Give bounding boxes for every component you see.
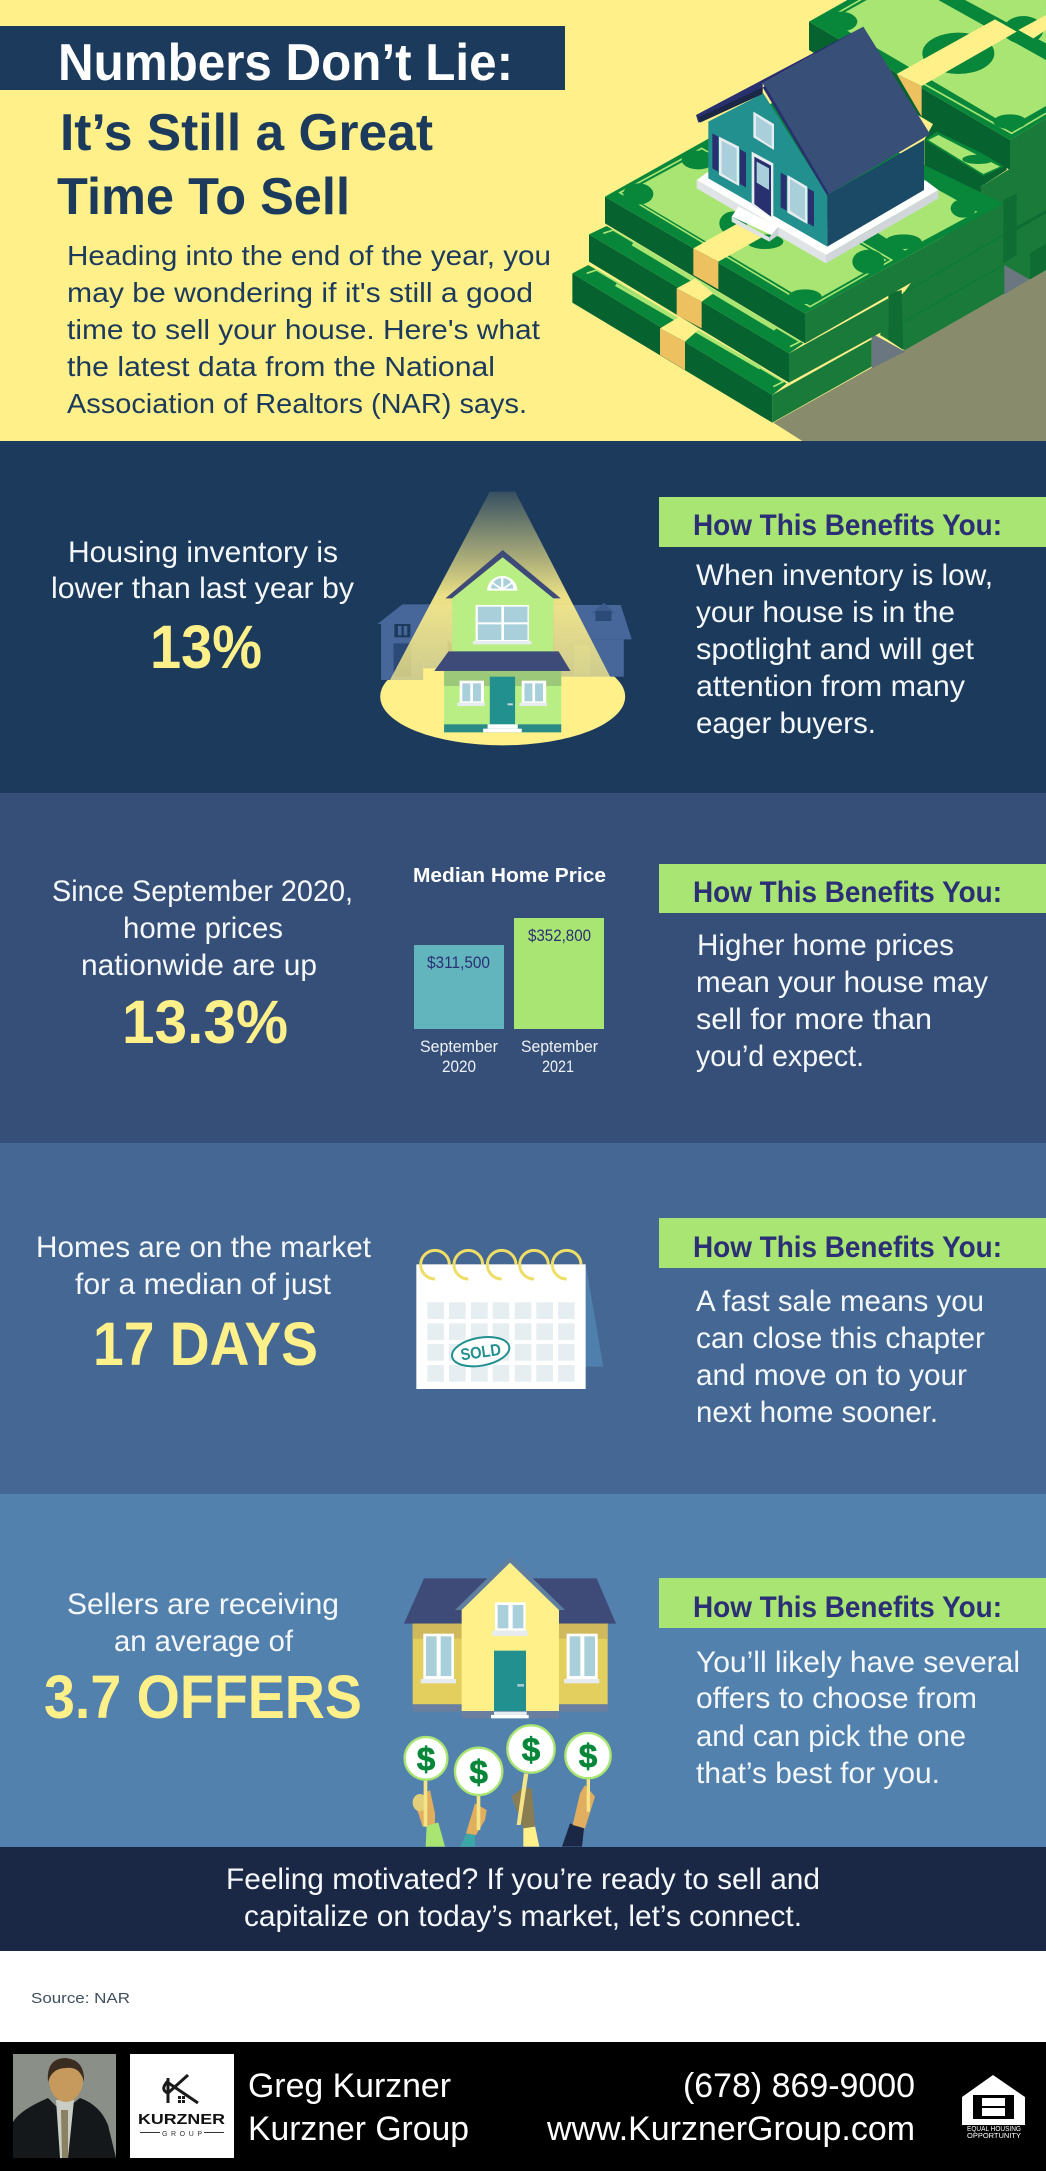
icon: calendar with sold stamp xyxy=(416,1250,603,1389)
statistic text: Sellers are receiving xyxy=(67,1588,339,1621)
benefit banner: How This Benefits You: xyxy=(693,1231,1002,1264)
statistic text: for a median of just xyxy=(75,1268,332,1301)
intro paragraph xyxy=(67,240,551,419)
statistic text xyxy=(52,875,353,1056)
intro paragraph: Association of Realtors (NAR) says. xyxy=(67,388,527,419)
call to action band: capitalize on today’s market, let’s connect. xyxy=(244,1900,802,1933)
benefit text: and can pick the one xyxy=(696,1720,966,1753)
statistic text xyxy=(36,1231,372,1378)
benefit banner: How This Benefits You: xyxy=(693,876,1002,909)
benefit banner xyxy=(659,497,1046,547)
benefit text xyxy=(696,929,988,1073)
call to action band: Feeling motivated? If you’re ready to sell and xyxy=(226,1863,820,1896)
benefit text: you’d expect. xyxy=(696,1040,864,1073)
icon: house with bidding hands xyxy=(404,1556,616,1847)
benefit text xyxy=(696,1285,985,1429)
subtitle: It’s Still a Great xyxy=(60,104,433,162)
statistic text: Since September 2020, xyxy=(52,875,353,908)
source note xyxy=(0,1951,1046,2042)
panel: housing inventory xyxy=(0,441,1046,793)
icon: calendar with sold stamp: SOLD xyxy=(459,1340,502,1364)
panel: offers xyxy=(0,1494,1046,1847)
statistic text: 17 DAYS xyxy=(93,1310,318,1378)
benefit text: attention from many xyxy=(696,670,965,703)
call to action band xyxy=(0,1847,1046,1951)
statistic text: 13% xyxy=(150,613,262,681)
bar chart: median home price: September xyxy=(521,1037,598,1056)
benefit text: spotlight and will get xyxy=(696,633,975,666)
benefit text: next home sooner. xyxy=(696,1396,938,1429)
bar chart: median home price: September xyxy=(420,1037,498,1056)
benefit text: When inventory is low, xyxy=(696,559,993,592)
illustration: house on stacks of money xyxy=(572,0,1046,442)
benefit banner xyxy=(659,1578,1046,1628)
statistic text: nationwide are up xyxy=(81,949,317,982)
intro paragraph: may be wondering if it's still a good xyxy=(67,277,533,308)
icon: house in spotlight xyxy=(378,492,632,745)
benefit text: that’s best for you. xyxy=(696,1757,940,1790)
statistic text: 3.7 OFFERS xyxy=(44,1663,362,1731)
statistic text: home prices xyxy=(123,912,283,945)
contact details xyxy=(546,2067,915,2148)
benefit text: offers to choose from xyxy=(696,1682,977,1715)
panel: home prices xyxy=(0,793,1046,1143)
agent name: Greg Kurzner xyxy=(248,2067,451,2105)
title banner: Numbers Don’t Lie: xyxy=(58,34,513,92)
company logo: KURZNER xyxy=(138,2111,225,2128)
agent name: Kurzner Group xyxy=(248,2110,469,2148)
statistic text: Homes are on the market xyxy=(36,1231,372,1264)
benefit text: eager buyers. xyxy=(696,707,876,740)
panel: hero xyxy=(0,0,1046,442)
contact details: (678) 869-9000 xyxy=(683,2067,915,2105)
icon: equal housing opportunity: EQUAL HOUSING xyxy=(967,2126,1021,2133)
agent name xyxy=(248,2067,469,2148)
subtitle xyxy=(57,104,433,226)
bar chart: median home price xyxy=(413,865,606,1076)
benefit banner: How This Benefits You: xyxy=(693,1591,1002,1624)
icon: house with bidding hands: $ xyxy=(579,1739,598,1776)
icon: house with bidding hands: $ xyxy=(522,1732,541,1769)
statistic text: 13.3% xyxy=(122,988,288,1056)
source note: Source: NAR xyxy=(31,1990,130,2007)
bar chart: median home price: $311,500 xyxy=(427,953,490,972)
company logo xyxy=(130,2054,234,2158)
benefit text: can close this chapter xyxy=(696,1322,985,1355)
intro paragraph: time to sell your house. Here's what xyxy=(67,314,540,345)
bar chart: median home price: 2020 xyxy=(442,1057,476,1076)
icon: equal housing opportunity xyxy=(962,2075,1025,2140)
benefit text xyxy=(696,559,993,740)
icon: house with bidding hands: $ xyxy=(469,1754,488,1791)
statistic text xyxy=(51,536,354,681)
bar chart: median home price: $352,800 xyxy=(528,926,591,945)
benefit text xyxy=(696,1646,1020,1790)
benefit text: and move on to your xyxy=(696,1359,967,1392)
benefit text: mean your house may xyxy=(696,966,988,999)
statistic text: Housing inventory is xyxy=(68,536,338,569)
footer: agent contact bar xyxy=(0,2042,1046,2171)
benefit banner xyxy=(659,1218,1046,1268)
benefit text: A fast sale means you xyxy=(696,1285,984,1318)
benefit text: You’ll likely have several xyxy=(696,1646,1020,1679)
benefit text: your house is in the xyxy=(696,596,955,629)
intro paragraph: the latest data from the National xyxy=(67,351,495,382)
statistic text xyxy=(44,1588,362,1731)
benefit text: sell for more than xyxy=(696,1003,932,1036)
intro paragraph: Heading into the end of the year, you xyxy=(67,240,551,271)
benefit banner: How This Benefits You: xyxy=(693,509,1002,542)
icon: house with bidding hands: $ xyxy=(417,1741,436,1778)
bar chart: median home price: 2021 xyxy=(542,1057,574,1076)
benefit banner xyxy=(659,864,1046,913)
hands and paddles xyxy=(413,1773,595,1847)
statistic text: an average of xyxy=(114,1625,294,1658)
icon: equal housing opportunity: OPPORTUNITY xyxy=(967,2133,1021,2140)
agent photo xyxy=(13,2054,116,2158)
company logo: GROUP xyxy=(162,2131,202,2138)
subtitle: Time To Sell xyxy=(57,168,350,226)
statistic text: lower than last year by xyxy=(51,572,354,605)
panel: days on market xyxy=(0,1143,1046,1494)
benefit text: Higher home prices xyxy=(697,929,954,962)
contact details: www.KurznerGroup.com xyxy=(546,2110,915,2148)
bar chart: median home price: Median Home Price xyxy=(413,865,606,887)
